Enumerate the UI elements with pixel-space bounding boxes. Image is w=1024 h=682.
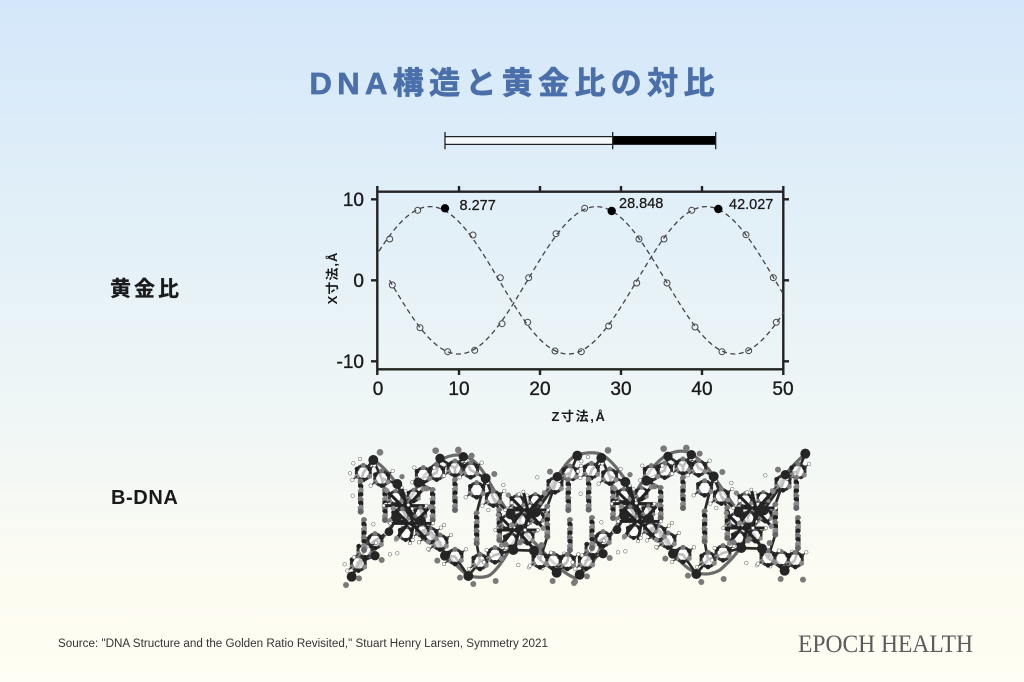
helix segment two	[571, 445, 811, 586]
marker values	[460, 196, 773, 214]
label: golden ratio: 黄金比	[110, 278, 182, 301]
black markers	[441, 204, 722, 215]
logo: Epoch Health: EPOCH HEALTH	[798, 631, 973, 658]
y axis numbers: 0	[353, 271, 364, 292]
x axis numbers: 0	[373, 379, 383, 400]
title: DNA構造と黄金比の対比	[310, 66, 714, 101]
open circle markers	[387, 205, 779, 355]
helix segment one	[343, 447, 583, 588]
label: B-DNA: B-DNA	[111, 487, 178, 509]
y axis numbers: 10	[343, 190, 364, 211]
golden ratio bar	[445, 132, 716, 149]
marker values: 8.277	[460, 198, 496, 214]
source note: Source: "DNA Structure and the Golden Ratio Revisited," Stuart Henry Larsen, Symmetry 2021	[58, 638, 548, 650]
helix curves	[377, 206, 784, 355]
x axis numbers: 30	[610, 379, 632, 400]
B-DNA molecular model	[343, 445, 811, 588]
y axis numbers	[337, 190, 364, 373]
marker values: 28.848	[619, 196, 663, 212]
y axis numbers: -10	[337, 352, 364, 373]
chart frame and ticks	[371, 186, 789, 375]
x axis numbers	[373, 379, 794, 400]
y axis title: X寸法,Å	[325, 252, 340, 304]
x axis numbers: 50	[772, 379, 794, 400]
x axis numbers: 10	[448, 379, 470, 400]
x axis title: Z寸法,Å	[552, 409, 606, 424]
x axis numbers: 20	[529, 379, 551, 400]
x axis numbers: 40	[691, 379, 713, 400]
chart: helix coordinates	[326, 186, 793, 423]
marker values: 42.027	[729, 197, 773, 213]
